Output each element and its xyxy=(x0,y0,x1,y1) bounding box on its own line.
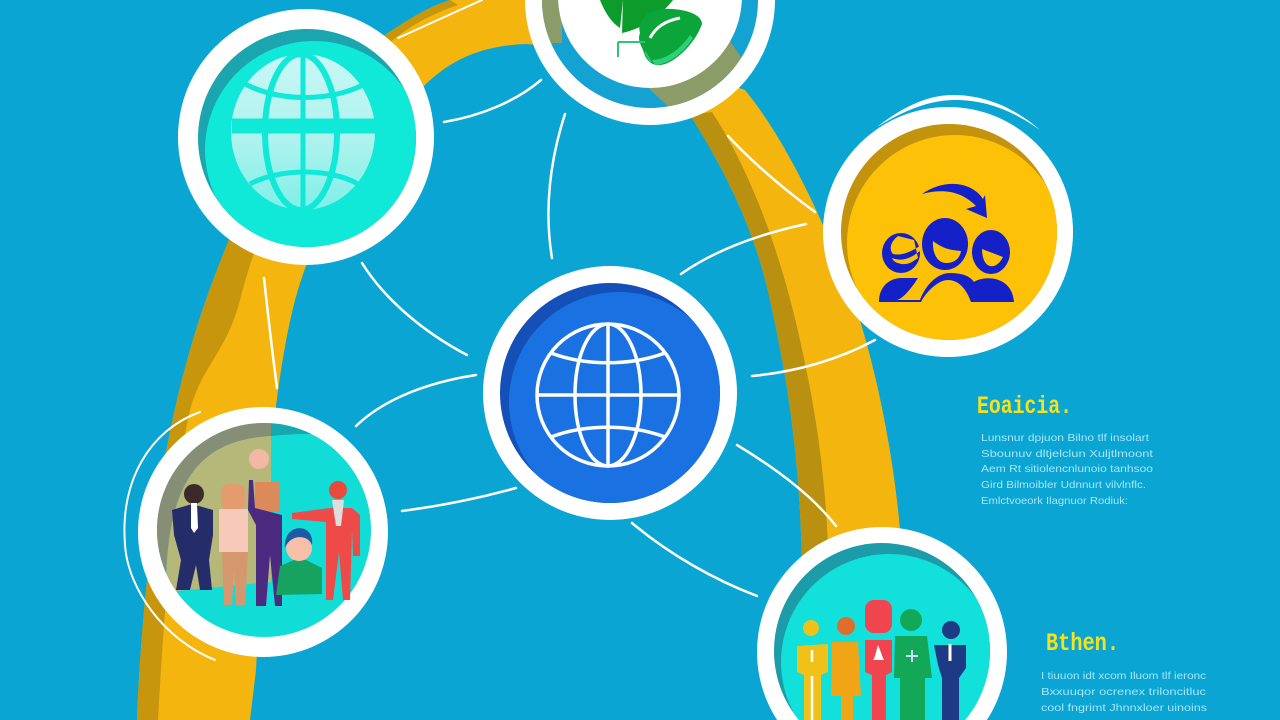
body text: Bxxuuqor ocrenex triloncitluc xyxy=(1041,686,1206,698)
icon: pale globe xyxy=(231,54,376,210)
figure: purple raised arm xyxy=(248,449,282,606)
node: top-left globe xyxy=(178,9,434,265)
arc accent above right node xyxy=(877,95,1040,130)
node: central globe xyxy=(483,266,737,520)
node: left group of people xyxy=(124,407,390,660)
figure: man in suit xyxy=(172,484,213,590)
figure: pink shirt xyxy=(219,484,248,605)
body text: cool fngrimt Jhnnxloer uinoins xyxy=(1041,702,1207,714)
people figures xyxy=(797,600,966,720)
body text: Lunsnur dpjuon Bilno tlf insolart xyxy=(981,432,1149,444)
node: right people exchange xyxy=(823,107,1073,357)
body text xyxy=(981,432,1153,507)
figure: red xyxy=(865,600,892,720)
text block: upper right xyxy=(977,392,1153,507)
golden arch xyxy=(137,0,900,720)
body text: Aem Rt sitiolencnlunoio tanhsoo xyxy=(981,463,1153,475)
heading: Eoaicia. xyxy=(977,392,1072,421)
heading: Bthen. xyxy=(1046,629,1119,658)
figure: red with beard xyxy=(292,481,360,600)
figure: green xyxy=(894,609,932,720)
icon: white globe xyxy=(537,324,679,466)
body text: Gird Bilmoibler Udnnurt vilvlnflc. xyxy=(981,479,1146,491)
body text: I tiuuon idt xcom Iluom tlf ieronc xyxy=(1041,670,1206,682)
node: bottom-right colored people xyxy=(757,527,1007,720)
connector lines xyxy=(264,0,875,596)
figure: navy xyxy=(934,621,966,720)
body text: Emlctvoeork Ilagnuor Rodiuk: xyxy=(981,495,1128,507)
people figures xyxy=(172,449,360,606)
node: top leaf xyxy=(525,0,775,125)
figure: orange xyxy=(831,617,861,720)
icon: green leaves xyxy=(600,0,702,65)
body text: Sbounuv dltjelclun Xuljtlmoont xyxy=(981,448,1153,460)
figure: yellow xyxy=(797,620,828,720)
icon: arrow over three people xyxy=(879,184,1014,302)
figure: seated green xyxy=(276,528,322,595)
text block: lower right xyxy=(1041,629,1207,714)
body text xyxy=(1041,670,1207,714)
